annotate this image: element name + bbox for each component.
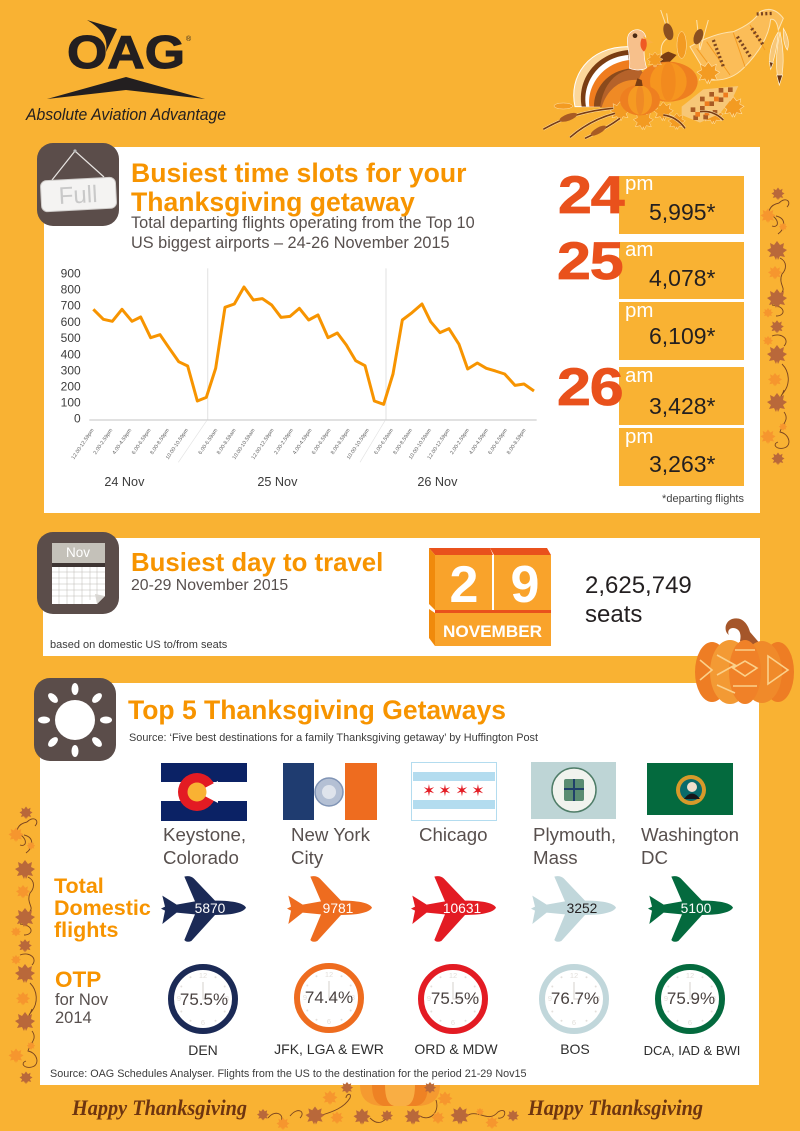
line chart: 10.00-10.59pm: [165, 427, 190, 461]
source note: Source: OAG Schedules Analyser. Flights from the US to the destination for the period 21-29 Nov15: [50, 1068, 527, 1080]
clock: JFK 74.4%: [297, 966, 361, 1030]
clock: DEN 75.5%: 12: [199, 971, 207, 980]
city labels: Colorado: [163, 847, 239, 868]
airport labels: ORD & MDW: [414, 1041, 498, 1057]
icon: calendar: [37, 532, 119, 614]
stat: seats: seats: [585, 601, 642, 628]
row label: total domestic flights: Domestic: [54, 896, 151, 920]
line chart: 26 Nov: [417, 475, 458, 489]
flag: Plymouth: [531, 762, 616, 819]
city labels: DC: [641, 847, 668, 868]
clock: DCA 75.9%: 3: [712, 994, 716, 1003]
stat: 26 am: 26: [557, 358, 622, 417]
clock: DEN 75.5%: 75.5%: [180, 990, 228, 1009]
plane: Washington 5100: [648, 876, 733, 942]
subheading: [131, 214, 475, 252]
small pumpkin: [620, 78, 660, 115]
icon: full sign: Full: [58, 181, 98, 210]
clock: DEN 75.5%: 9: [177, 994, 181, 1003]
city labels: City: [291, 847, 324, 868]
line chart: 4.00-4.59pm: [112, 427, 134, 456]
line chart: 900: [61, 266, 81, 280]
calendar blocks: 29 November: [429, 548, 551, 646]
clock: BOS 76.7%: 6: [572, 1018, 576, 1027]
line chart: 10.00-10.59am: [232, 427, 257, 461]
clock: ORD 75.5%: 75.5%: [431, 989, 479, 1008]
logo: OAG: ®: [186, 35, 192, 43]
line chart: 300: [61, 363, 81, 377]
footer text: left greeting: Happy Thanksgiving: [71, 1095, 247, 1120]
line chart: 200: [61, 380, 81, 394]
subheading: Total departing flights operating from the Top 10: [131, 214, 475, 232]
line chart: 25 Nov: [257, 475, 298, 489]
panel: busiest day to travel: [37, 532, 760, 656]
line chart: 6.00-6.59am: [198, 427, 220, 456]
line chart: 500: [61, 331, 81, 345]
stat: 26 am: 3,428*: [649, 393, 716, 419]
heading: Busiest day to travel: [131, 549, 383, 577]
clock: DCA 75.9%: 6: [688, 1018, 692, 1027]
clock: BOS 76.7%: 9: [548, 994, 552, 1003]
logo: OAG: [25, 20, 226, 124]
clock: ORD 75.5%: 3: [475, 994, 479, 1003]
line chart: 12.00-12.59pm: [427, 427, 452, 461]
line chart: 100: [61, 396, 81, 410]
line chart: 12.00-12.59pm: [71, 427, 96, 461]
stat: 26 pm: pm: [625, 425, 653, 448]
big pumpkin: [639, 52, 698, 102]
clock: JFK 74.4%: 9: [303, 993, 307, 1002]
line chart: 10.00-10.59pm: [346, 427, 371, 461]
line chart: 0: [74, 412, 81, 426]
line chart: 8.00-8.59pm: [149, 427, 171, 456]
panel: top 5 getaways: [34, 678, 759, 1085]
city labels: Plymouth,: [533, 824, 616, 845]
city labels: Mass: [533, 847, 578, 868]
plane: New York 9781: 9781: [323, 901, 353, 916]
icon: full sign: [37, 143, 119, 226]
airport labels: BOS: [560, 1041, 590, 1057]
feathers: [769, 28, 788, 85]
heading: Thanksgiving getaway: [131, 187, 415, 217]
source line: Source: ‘Five best destinations for a family Thanksgiving getaway’ by Huffington Post: [129, 732, 538, 744]
stat: 25 pm: [619, 299, 744, 360]
icon: calendar: Nov: [66, 545, 90, 560]
footer text: right greeting: Happy Thanksgiving: [527, 1095, 703, 1120]
line chart: 8.00-8.59pm: [506, 427, 528, 456]
city labels: Washington: [641, 824, 739, 845]
note: based on domestic US to/from seats: [50, 639, 228, 651]
heading: Busiest time slots for your: [131, 158, 466, 188]
calendar blocks: 29 November: NOVEMBER: [443, 623, 542, 641]
turkey wing: [602, 80, 638, 107]
footnote: departing flights: *departing flights: [662, 493, 744, 505]
clock: JFK 74.4%: 6: [327, 1017, 331, 1026]
line chart: 4.00-4.59pm: [468, 427, 490, 456]
stat: 26 am: [557, 358, 744, 425]
clock: DCA 75.9%: 9: [664, 994, 668, 1003]
line chart: [61, 266, 537, 489]
airport labels: [188, 1041, 740, 1058]
illustration: pumpkin: [695, 618, 794, 704]
stat: 26 pm: 3,263*: [649, 451, 716, 477]
stat: 24 pm: [558, 166, 744, 234]
stat: 25 am: 4,078*: [649, 265, 716, 291]
airport labels: DEN: [188, 1042, 218, 1058]
row label: OTP: [55, 967, 109, 1027]
footer: pumpkin and leaves: [257, 1082, 519, 1130]
airport labels: JFK, LGA & EWR: [274, 1041, 384, 1057]
line chart: 8.00-8.59am: [216, 427, 238, 456]
flag: Washington: [647, 763, 733, 815]
line chart: 10.00-10.59am: [408, 427, 433, 461]
clock: BOS 76.7%: [542, 967, 606, 1031]
line chart: 24 Nov: [104, 475, 145, 489]
city labels: [163, 824, 739, 868]
clock: DEN 75.5%: 3: [225, 994, 229, 1003]
clock: DCA 75.9%: 75.9%: [667, 989, 715, 1008]
panel: busiest time slots: [37, 143, 760, 513]
date range: 20-29 November 2015: [131, 577, 288, 594]
clock: ORD 75.5%: [421, 967, 485, 1031]
row label: OTP: OTP: [55, 967, 101, 992]
icon: sun: [34, 678, 116, 761]
clock: ORD 75.5%: 6: [451, 1018, 455, 1027]
plane: Chicago 10631: 10631: [443, 901, 481, 916]
wheat stalks: [661, 10, 708, 60]
row label: total domestic flights: flights: [54, 918, 119, 942]
subheading: US biggest airports – 24-26 November 2015: [131, 234, 450, 252]
line chart: 700: [61, 299, 81, 313]
line chart: 8.00-8.59am: [392, 427, 414, 456]
row label: OTP: 2014: [55, 1009, 92, 1027]
heading: [131, 158, 466, 217]
line chart: 4.00-4.59pm: [292, 427, 314, 456]
logo: OAG: OAG: [67, 26, 185, 78]
row label: total domestic flights: [54, 874, 151, 942]
line chart: 6.00-6.59pm: [131, 427, 153, 456]
line chart: 2.00-2.59pm: [273, 427, 295, 456]
row label: total domestic flights: Total: [54, 874, 104, 898]
plane: Washington 5100: 5100: [681, 901, 712, 916]
clock: DEN 75.5%: [171, 967, 235, 1031]
line chart: 800: [61, 283, 81, 297]
stat: 25 am: 25: [557, 232, 623, 291]
flag: Chicago: ✶: [471, 783, 485, 800]
plane: New York 9781: [287, 876, 372, 942]
clock: BOS 76.7%: 12: [570, 971, 578, 980]
turkey tail: [574, 47, 633, 107]
line chart: 400: [61, 347, 81, 361]
stat: 25 pm: pm: [625, 299, 653, 322]
clock: BOS 76.7%: 3: [596, 994, 600, 1003]
clock: JFK 74.4%: 3: [351, 993, 355, 1002]
airport labels: DCA, IAD & BWI: [644, 1043, 740, 1058]
heading: Top 5 Thanksgiving Getaways: [128, 695, 506, 725]
city labels: Keystone,: [163, 824, 246, 845]
clock: DCA 75.9%: [658, 967, 722, 1031]
stat: 26 am: am: [625, 364, 653, 387]
clock: DEN 75.5%: 6: [201, 1018, 205, 1027]
plane: Plymouth 3252: [531, 876, 616, 942]
turkey neck and head: [627, 30, 653, 70]
clock: JFK 74.4%: 12: [325, 970, 333, 979]
line chart: 600: [61, 315, 81, 329]
line chart: 6.00-6.59pm: [311, 427, 333, 456]
corn: [682, 86, 738, 123]
flag: Colorado: [161, 763, 247, 821]
flag: New York City: [283, 763, 377, 820]
line chart: 12.00-12.59pm: [251, 427, 276, 461]
flag: Chicago: ✶: [455, 783, 469, 800]
clock: DCA 75.9%: 12: [686, 971, 694, 980]
stat: seats: [585, 572, 692, 628]
stat: 26 pm: [619, 425, 744, 486]
cornucopia: [690, 9, 783, 80]
wheat lower left: [543, 103, 723, 138]
leaves: [610, 52, 744, 130]
stat: seats: 2,625,749: [585, 572, 692, 599]
line chart: 6.00-6.59pm: [487, 427, 509, 456]
stat: 24 pm: 5,995*: [649, 199, 716, 225]
flag: Chicago: [412, 762, 496, 820]
line chart: 2.00-2.59pm: [449, 427, 471, 456]
clock: ORD 75.5%: 12: [449, 971, 457, 980]
stat: 24 pm: 24: [558, 166, 625, 225]
clock: ORD 75.5%: 9: [427, 994, 431, 1003]
plane: Keystone 5870: [161, 876, 246, 942]
clock: BOS 76.7%: 76.7%: [551, 989, 599, 1008]
flag: Chicago: ✶: [438, 783, 452, 800]
line chart: 6.00-6.59am: [373, 427, 395, 456]
flag: Chicago: ✶: [422, 783, 436, 800]
decoration: left leaf vine: [8, 806, 37, 1084]
calendar blocks: 29 November: 9: [511, 556, 539, 614]
plane: Chicago 10631: [411, 876, 496, 942]
stat: 25 pm: 6,109*: [649, 323, 716, 349]
line chart: 2.00-2.59pm: [93, 427, 115, 456]
line chart: 8.00-8.59pm: [330, 427, 352, 456]
stat: 24 pm: pm: [625, 172, 653, 195]
calendar blocks: 29 November: 2: [450, 556, 478, 614]
logo: OAG: Absolute Aviation Advantage: [25, 105, 226, 124]
plane: Plymouth 3252: 3252: [567, 901, 597, 916]
row label: OTP: for Nov: [55, 991, 109, 1009]
decoration: right leaf vine: [760, 188, 789, 465]
city labels: Chicago: [419, 824, 488, 845]
city labels: New York: [291, 824, 371, 845]
stat: 25 am: am: [625, 238, 653, 261]
stat: 25 am: [557, 232, 744, 299]
plane: Keystone 5870: 5870: [195, 901, 226, 916]
illustration: turkey, pumpkins and cornucopia: [543, 9, 788, 138]
clock: JFK 74.4%: 74.4%: [305, 988, 353, 1007]
turkey body: [600, 68, 657, 108]
